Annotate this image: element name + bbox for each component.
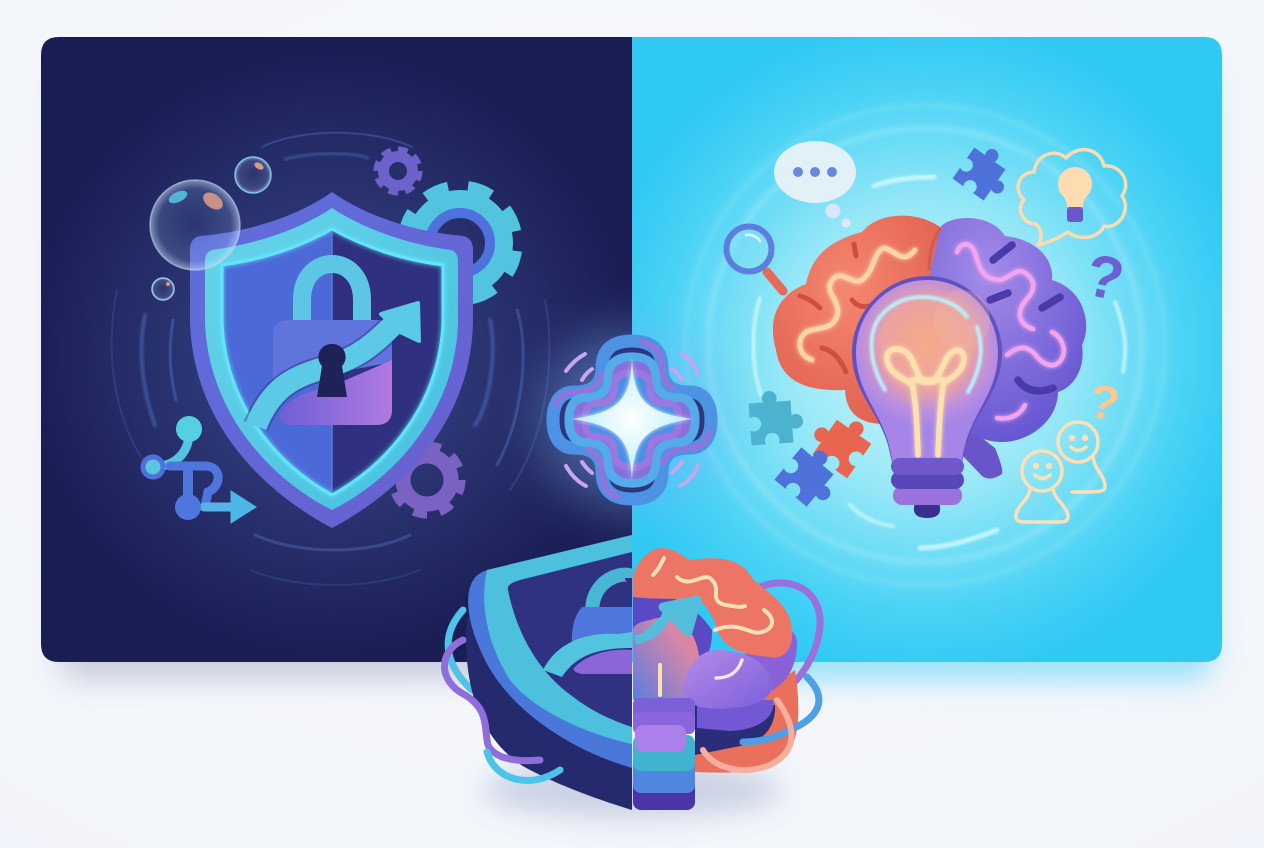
merged ribbons behind bbox=[448, 583, 820, 692]
icon: two outlined people bbox=[1016, 422, 1105, 522]
mini bulb bbox=[1058, 167, 1092, 222]
bulb screw base bbox=[891, 458, 964, 518]
icon: orange question mark: ? bbox=[1084, 374, 1124, 432]
merged centre gradient section bbox=[633, 595, 707, 700]
icon: medium bubble bbox=[235, 157, 271, 193]
connector glow bbox=[540, 328, 724, 512]
bulb filament bbox=[887, 349, 964, 455]
panel: dark security side bbox=[41, 37, 632, 662]
merged dark inner face bbox=[508, 552, 632, 727]
merged blue shield band bbox=[468, 535, 632, 768]
icon: top blue puzzle piece bbox=[953, 139, 1019, 206]
brain stem bbox=[962, 425, 1002, 479]
panel: bright idea side bbox=[632, 37, 1222, 662]
dark brain folds bbox=[990, 245, 1060, 391]
padlock bbox=[273, 264, 392, 425]
merged right dark layer bbox=[695, 705, 775, 755]
icon: small bubble bbox=[152, 278, 174, 300]
icon: blue puzzle piece bbox=[774, 439, 849, 514]
shield neon outline bbox=[222, 229, 443, 495]
brain right purple half bbox=[920, 218, 1086, 442]
shield cyan band bbox=[205, 208, 458, 510]
icon: speech bubble bbox=[774, 141, 856, 228]
merged arrow bbox=[635, 600, 697, 640]
shield right dark face bbox=[332, 229, 443, 495]
icon: lower purple gear bbox=[395, 448, 459, 512]
merged stacked base bbox=[633, 698, 695, 810]
bulb glass bbox=[856, 280, 998, 464]
outer tube loop bbox=[553, 341, 711, 499]
purple neon folds bbox=[957, 244, 1064, 418]
illustration: light bulb bbox=[852, 276, 1002, 518]
shield outer rim bbox=[190, 192, 473, 528]
panel shadows bbox=[60, 70, 1212, 680]
merged neon folds bbox=[653, 558, 772, 695]
merged front ribbons bbox=[444, 640, 819, 780]
icon: teal puzzle piece bbox=[748, 389, 805, 445]
icon: security shield bbox=[190, 192, 473, 528]
icon: purple question mark: ? bbox=[1080, 241, 1130, 314]
icon: branching path arrow bbox=[143, 416, 256, 523]
icon: large cyan gear bbox=[400, 183, 520, 303]
merged cyan shield band bbox=[484, 535, 632, 744]
purple strand overlay bbox=[553, 341, 711, 499]
bulb dark halo bbox=[852, 276, 1002, 462]
merged dark shield base bbox=[466, 617, 632, 810]
coral neon fold bbox=[800, 248, 915, 360]
illustration: brain bbox=[773, 216, 1086, 479]
signal rings around shield bbox=[112, 133, 549, 585]
icon: interlaced plus connector bbox=[540, 328, 724, 512]
icon: small purple gear bbox=[378, 151, 418, 191]
merged lock pieces bbox=[543, 575, 632, 677]
brain left coral half bbox=[773, 216, 940, 424]
middle tube loop bbox=[569, 357, 695, 483]
icon: coral puzzle piece bbox=[804, 404, 878, 478]
glowing four-point star bbox=[572, 358, 692, 480]
glass neon arcs bbox=[872, 297, 981, 392]
icon: magnifying glass bbox=[726, 226, 783, 291]
glow rings around bulb bbox=[685, 105, 1165, 585]
merged right purple side layers bbox=[740, 625, 797, 692]
sparkle ticks bbox=[566, 354, 698, 486]
keyhole bbox=[317, 344, 347, 397]
merged right coral base bbox=[695, 670, 798, 773]
growth arrow bbox=[256, 303, 419, 426]
inner tube loop bbox=[585, 373, 679, 467]
illustration: merged shield and brain bbox=[444, 535, 820, 810]
icon: thought bubble with bulb bbox=[1018, 150, 1126, 245]
shield left blue face bbox=[222, 229, 332, 495]
merged purple lobe bbox=[683, 650, 772, 709]
merged coral brain top bbox=[633, 548, 792, 658]
soft ground shadow bbox=[482, 762, 782, 818]
icon: large bubble bbox=[150, 180, 240, 270]
